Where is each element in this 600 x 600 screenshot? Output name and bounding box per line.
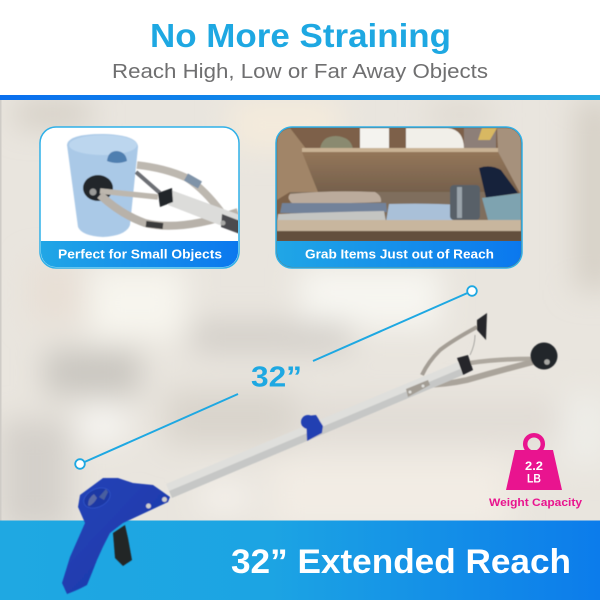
card 2 cabinet photo [277, 128, 521, 241]
card 2 label: Grab Items Just out of Reach [305, 248, 494, 262]
pole [166, 362, 463, 498]
handle [62, 478, 170, 594]
upper compartment [359, 128, 464, 148]
dimension line [75, 286, 477, 469]
cabinet sides [277, 128, 318, 200]
icon: weight: 2.2 [525, 461, 543, 473]
handle recess [81, 484, 113, 512]
blurred living room background [0, 100, 600, 530]
footer heading: 32” Extended Reach [231, 543, 571, 581]
wheel bolt [544, 359, 550, 365]
card 1 product photo [67, 134, 240, 237]
reacher grabber product [62, 313, 558, 594]
title: No More Straining [150, 17, 451, 54]
card 1 photo background [40, 127, 239, 268]
pole bolts [408, 390, 412, 394]
cup [67, 134, 138, 237]
suction cup [83, 175, 113, 201]
weight capacity badge [489, 435, 583, 509]
weight capacity label: Weight Capacity [489, 497, 583, 509]
card 1 label bar [41, 241, 238, 267]
footer band [0, 520, 600, 600]
card 2 border [276, 127, 522, 268]
icon: weight [506, 435, 562, 490]
card: cabinet shelf [276, 127, 522, 268]
card 1 label: Perfect for Small Objects [58, 248, 222, 262]
subtitle: Reach High, Low or Far Away Objects [112, 61, 488, 83]
icon: weight: LB [527, 474, 541, 486]
shelf board [302, 148, 498, 152]
sleeve connector [301, 415, 323, 441]
dimension label: 32” [251, 362, 302, 394]
tether wire [470, 335, 475, 355]
towels [288, 191, 381, 203]
arm bracket [406, 380, 430, 397]
metal arms [137, 165, 222, 213]
jars [450, 185, 480, 220]
card 2 label bar [277, 241, 521, 267]
upper metal arm [422, 327, 477, 375]
wheel [530, 342, 558, 370]
collar [457, 355, 473, 375]
header background [0, 0, 600, 95]
suction cup [477, 313, 487, 340]
front board [277, 220, 521, 231]
card: small objects [40, 127, 240, 268]
collar [158, 188, 173, 207]
pole [167, 190, 238, 226]
lower metal arms [470, 359, 545, 363]
handle rivets [146, 497, 167, 508]
trigger [113, 525, 132, 566]
header rule [0, 95, 600, 100]
